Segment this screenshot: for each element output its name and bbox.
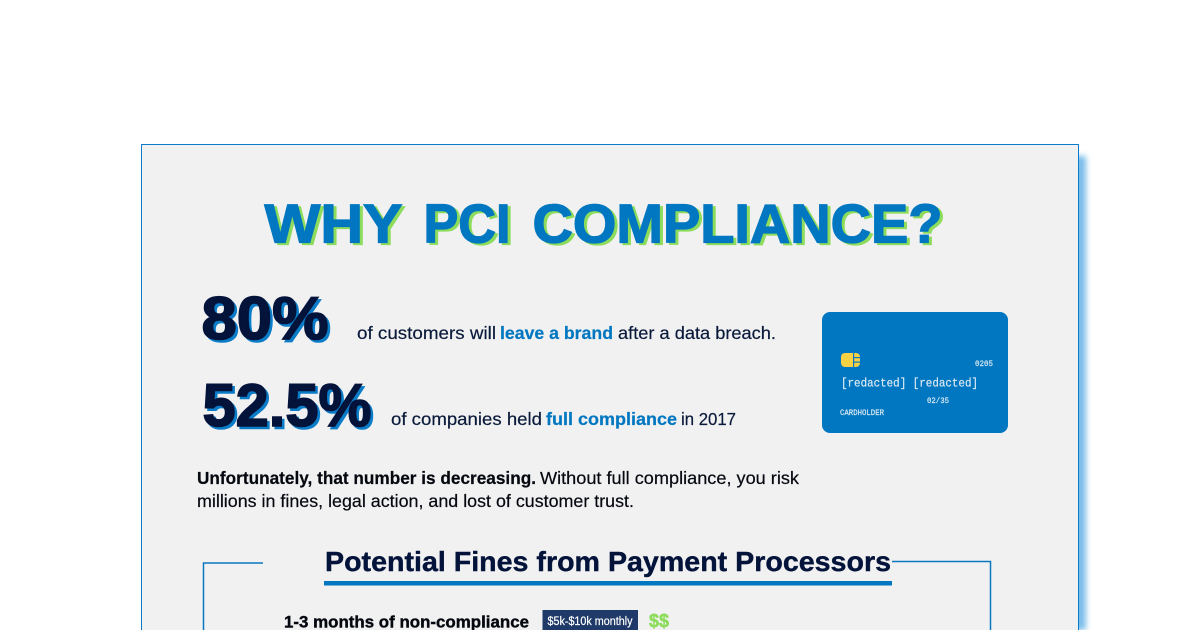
stat number: 80%: 80% xyxy=(204,288,331,354)
title: COMPLIANCE? xyxy=(536,194,946,256)
badge: monthly fine xyxy=(542,610,638,630)
frame: fines section outline xyxy=(204,562,990,630)
badge: monthly fine: $5k-$10k monthly xyxy=(548,616,633,628)
stat text: full compliance xyxy=(391,409,736,429)
stat number: 52.5%: 52.5% xyxy=(202,372,372,439)
stat text: full compliance: of companies held xyxy=(391,409,542,429)
card details xyxy=(840,359,993,418)
text block: risk statement: Without full compliance, you risk xyxy=(540,468,799,488)
panel: background card with shadow xyxy=(142,144,1086,630)
stat text: leave a brand xyxy=(357,323,776,343)
stat number: 52.5%: 52.5% xyxy=(205,374,374,442)
stat text: full compliance: in 2017 xyxy=(681,409,736,429)
heading: potential fines: Potential Fines from Payment Processors xyxy=(325,546,891,577)
statistic: 80% of customers xyxy=(202,285,776,354)
title: COMPLIANCE? xyxy=(532,192,942,254)
title: WHY xyxy=(268,194,406,256)
stat text: leave a brand: after a data breach. xyxy=(618,323,776,343)
stat text: leave a brand: leave a brand xyxy=(500,323,613,343)
statistic: 52.5% of companies xyxy=(202,372,736,442)
title: WHY xyxy=(264,192,402,254)
card details: [redacted] [redacted] xyxy=(841,376,978,390)
text block: risk statement: Unfortunately, that number is decreasing. xyxy=(197,468,536,488)
text block: risk statement xyxy=(197,468,799,511)
card details: CARDHOLDER xyxy=(840,408,884,418)
stat number: 80%: 80% xyxy=(202,285,328,352)
title: PCI xyxy=(426,194,514,256)
title xyxy=(264,192,946,256)
icon: card chip xyxy=(841,353,860,367)
title: PCI xyxy=(424,192,510,254)
stat text: leave a brand: of customers will xyxy=(357,323,496,343)
card details: 0205 xyxy=(975,359,993,369)
stat text: full compliance: full compliance xyxy=(546,409,677,429)
icon: credit card xyxy=(822,312,1008,433)
text block: risk statement: millions in fines, legal action, and lost of customer trust. xyxy=(197,491,634,511)
fine row: 1-3 months xyxy=(284,610,669,630)
card details: 02/35 xyxy=(927,396,949,406)
